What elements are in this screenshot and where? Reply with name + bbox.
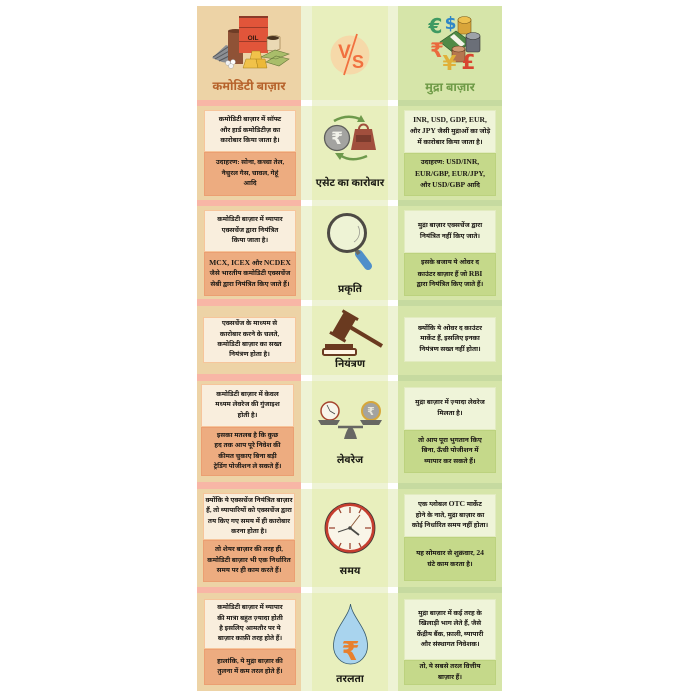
text: row 2 currency detail: काउंटर बाज़ार हैं जो RBI <box>418 269 482 278</box>
text: row 1 commodity examples <box>204 152 296 196</box>
text: row 2 commodity detail <box>204 252 296 296</box>
text: row 2 commodity detail: सेबी द्वारा नियंत्रित किए जाते हैं। <box>210 281 290 288</box>
text: row 4 commodity leverage: होती है। <box>238 412 257 419</box>
text: row 3 currency regulation: क्योंकि ये ओवर द काउंटर <box>418 325 482 332</box>
text: row 4 currency leverage detail: बिना, ऊँची पोजीशन में <box>421 447 479 454</box>
icon: gavel <box>322 309 383 356</box>
label: regulation: नियंत्रण <box>335 359 365 370</box>
icon: currencies pile: € <box>428 14 442 38</box>
text: row 4 commodity leverage detail: ट्रेडिंग पोजीशन ले सकते हैं। <box>214 463 281 470</box>
text: row 6 currency liquidity detail: तो, ये सबसे तरल वित्तीय <box>419 663 481 670</box>
text: row 6 commodity liquidity: बाज़ार काफ़ी तरह होते हैं। <box>218 635 282 642</box>
heading: commodity market: कमोडिटी बाज़ार <box>212 79 286 93</box>
label: leverage: लेवरेज <box>337 455 363 466</box>
text: row 1 currency description: INR, USD, GDP, EUR, <box>413 115 487 124</box>
icon: VS badge <box>330 34 370 76</box>
text: row 2 currency detail: इसके बजाय ये ओवर द <box>421 259 479 266</box>
text: row 6 commodity liquidity <box>204 599 296 649</box>
text: row 3 commodity regulation: नियंत्रण होता है। <box>229 351 270 358</box>
text: row 2 commodity description: एक्सचेंज द्वारा नियंत्रित <box>222 227 278 234</box>
text: row 4 commodity leverage <box>201 384 294 427</box>
text: row 2 currency detail: द्वारा नियंत्रित किए जाते हैं। <box>417 281 483 288</box>
text: row 4 currency leverage <box>404 387 496 430</box>
text: row 5 commodity timing: क्योंकि ये एक्सचेंज नियंत्रित बाज़ार <box>206 497 292 504</box>
text: row 5 commodity timing: हैं, तो व्यापारियों को एक्सचेंज द्वारा <box>206 507 292 514</box>
text: row 3 currency regulation <box>404 317 496 362</box>
text: row 1 currency examples: EUR/GBP, EUR/JPY, <box>415 169 485 178</box>
text: row 2 commodity detail: जैसे भारतीय कमोडिटी एक्सचेंज <box>210 270 290 277</box>
text: row 1 commodity description: कारोबार किया जाता है। <box>220 137 280 144</box>
text: row 5 currency timing: होने के नाते, मुद्रा बाज़ार का <box>416 512 484 519</box>
icon: commodities pile: OIL <box>248 35 258 42</box>
text: row 1 commodity description: और हार्ड कमोडिटीज़ का <box>220 127 280 134</box>
text: row 6 currency liquidity: केंद्रीय बैंक, फ़ाली, व्यापारी <box>417 630 483 638</box>
text: row 5 commodity timing detail: समय पर ही काम करते हैं। <box>217 567 281 574</box>
panel: commodity market column <box>197 6 301 691</box>
text: row 3 commodity regulation: कारोबार करने के चलते, <box>220 331 279 338</box>
text: row 4 currency leverage: मुद्रा बाज़ार में ज़्यादा लेवरेज <box>415 399 485 406</box>
text: row 5 commodity timing: तय किए गए समय में ही कारोबार <box>208 518 290 524</box>
text: row 5 commodity timing <box>203 493 295 540</box>
icon: currencies pile: $ <box>445 14 456 34</box>
text: row 1 currency description <box>404 110 496 153</box>
text: row 6 commodity liquidity detail: तुलना में कम तरल होते हैं। <box>217 668 283 675</box>
panel: centre column <box>301 6 398 691</box>
text: row 6 commodity liquidity detail: हालांकि, ये मुद्रा बाज़ार की <box>217 658 283 665</box>
text: row 5 currency timing detail <box>404 537 496 581</box>
text: row 1 commodity description <box>204 110 296 152</box>
text: row 6 commodity liquidity: है इसलिए आमतौर पर ये <box>219 625 281 632</box>
text: row 4 currency leverage detail: व्यापार कर सकते हैं। <box>424 458 476 465</box>
label: nature: प्रकृति <box>338 284 362 295</box>
text: row 3 commodity regulation <box>203 317 296 363</box>
text: row 4 commodity leverage detail <box>201 427 294 476</box>
icon: balance scale: ₹ <box>367 405 375 418</box>
text: row 5 commodity timing detail: तो शेयर बाज़ार की तरह ही, <box>215 546 283 553</box>
text: row 6 commodity liquidity: की मात्रा बहुत ज़्यादा होती <box>217 615 283 622</box>
text: row 6 currency liquidity <box>404 599 496 660</box>
text: row 4 currency leverage detail <box>404 430 496 473</box>
text: row 5 currency timing detail: घंटे काम करता है। <box>427 560 473 568</box>
text: row 2 currency description <box>404 210 496 253</box>
heading: currency market: मुद्रा बाज़ार <box>425 80 475 94</box>
label: time: समय <box>340 566 360 577</box>
icon: asset exchange: ₹ <box>331 129 343 149</box>
text: row 1 commodity description: कमोडिटी बाज़ार में सॉफ्ट <box>219 116 281 123</box>
text: row 1 currency description: और JPY जैसी मुद्राओं का जोड़े <box>410 126 490 135</box>
icon: currencies pile: ₹ <box>430 38 444 62</box>
text: row 4 currency leverage detail: तो आप पूरा भुगतान किए <box>418 437 482 444</box>
icon: magnifying glass <box>327 213 372 270</box>
panel: centre column inner strip <box>312 6 388 691</box>
icon: clock <box>324 502 376 554</box>
text: row 5 currency timing: कोई निर्धारित समय नहीं होता। <box>412 522 488 529</box>
text: row 4 commodity leverage detail: हद तक आप पूरे निवेश की <box>214 442 281 449</box>
icon: rupee water drop: ₹ <box>341 637 360 667</box>
text: row 6 currency liquidity: और संस्थागत निवेशक। <box>420 641 480 648</box>
text: row 4 commodity leverage detail: कीमत चुकाए बिना बड़ी <box>218 452 277 460</box>
text: row 2 currency description: मुद्रा बाज़ार एक्सचेंज द्वारा <box>418 222 482 229</box>
icon: currencies pile <box>428 14 480 72</box>
text: row 1 commodity examples: नैचुरल गैस, चावल, गेहूं <box>222 170 278 177</box>
text: row 3 currency regulation: नियंत्रण सख्त नहीं होता। <box>419 346 481 353</box>
text: row 3 currency regulation: मार्केट हैं, इसलिए इनका <box>420 335 480 342</box>
text: row 2 commodity detail: MCX, ICEX और NCDEX <box>209 258 291 267</box>
text: row 5 commodity timing detail: कमोडिटी बाज़ार भी एक निर्धारित <box>207 557 291 564</box>
icon: asset exchange <box>324 115 376 160</box>
text: row 5 commodity timing: करना होता है। <box>231 528 267 535</box>
text: row 5 currency timing detail: यह सोमवार से शुक्रवार, 24 <box>416 548 484 557</box>
label: liquidity: तरलता <box>336 674 364 685</box>
text: row 6 currency liquidity detail: बाज़ार हैं। <box>438 674 462 680</box>
label: assets traded: एसेट का कारोबार <box>316 178 384 189</box>
text: row 4 commodity leverage: कमोडिटी बाज़ार में केवल <box>216 391 279 398</box>
text: row 6 currency liquidity: मुद्रा बाज़ार में कई तरह के <box>418 610 482 617</box>
text: row 1 currency examples: और USD/GBP आदि <box>420 180 480 189</box>
text: row 6 currency liquidity: खिलाड़ी भाग लेते हैं, जैसे <box>419 620 481 627</box>
text: row 1 currency examples <box>404 153 496 196</box>
text: row 6 commodity liquidity: कमोडिटी बाज़ार में व्यापार <box>217 604 283 611</box>
text: row 6 currency liquidity detail <box>404 660 496 685</box>
text: row 2 currency detail <box>404 253 496 296</box>
text: row 2 commodity description: किया जाता है। <box>232 237 268 244</box>
text: row 5 commodity timing detail <box>203 540 295 582</box>
icon: VS badge: V <box>338 42 351 63</box>
text: row 2 currency description: नियंत्रित नहीं किए जाते। <box>420 232 480 240</box>
icon: VS badge: S <box>352 52 364 72</box>
text: row 4 currency leverage: मिलता है। <box>437 410 463 416</box>
text: row 1 currency examples: उदाहरण: USD/INR, <box>421 157 479 166</box>
text: row 2 commodity description <box>204 210 296 252</box>
row separators <box>197 100 502 593</box>
panel: currency market column <box>398 6 502 691</box>
text: row 2 commodity description: कमोडिटी बाज़ार में व्यापार <box>217 216 283 223</box>
text: row 1 currency description: में कारोबार किया जाता है। <box>417 139 483 146</box>
text: row 1 commodity examples: आदि <box>243 180 257 187</box>
text: row 1 commodity examples: उदाहरण: सोना, कच्चा तेल, <box>216 159 284 166</box>
text: row 6 commodity liquidity detail <box>204 649 296 685</box>
icon: balance scale <box>318 401 382 439</box>
text: row 3 commodity regulation: एक्सचेंज के माध्यम से <box>222 320 277 327</box>
icon: commodities pile <box>212 16 290 69</box>
text: row 4 commodity leverage: मध्यम लेवरेज की गुंजाइश <box>215 401 280 408</box>
text: row 4 commodity leverage detail: इसका मतलब है कि कुछ <box>217 432 278 439</box>
text: row 3 commodity regulation: कमोडिटी बाज़ार का सख्त <box>217 341 282 348</box>
text: row 5 currency timing <box>404 494 496 537</box>
text: row 5 currency timing: एक ग्लोबल OTC मार्केट <box>418 499 482 508</box>
icon: rupee water drop <box>333 604 368 667</box>
